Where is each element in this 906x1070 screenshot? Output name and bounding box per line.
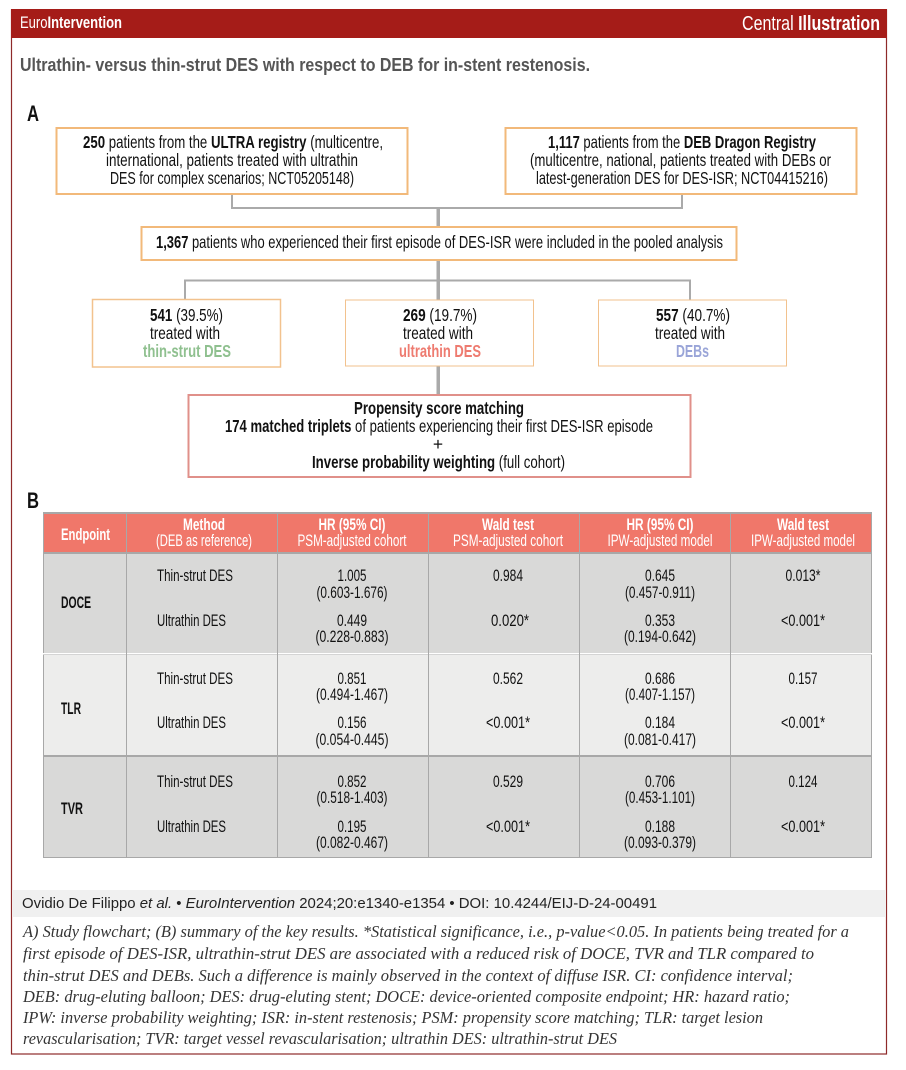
column dividers bbox=[126, 514, 731, 857]
row: TVR: (0.453-1.101) bbox=[625, 789, 695, 807]
table header bbox=[44, 514, 871, 552]
caption text: first episode of DES-ISR, ultrathin-strut DES are associated with a reduced risk of DOCE, TVR and TLR compared to bbox=[23, 944, 814, 963]
row: TVR: <0.001* bbox=[486, 818, 530, 836]
header bar bbox=[11, 9, 887, 38]
row: TLR bbox=[61, 670, 825, 749]
row: TVR: <0.001* bbox=[781, 818, 825, 836]
arrow: registries to pooled analysis bbox=[232, 194, 682, 208]
row: DOCE: 1.005 bbox=[338, 567, 366, 585]
row: TLR: 0.157 bbox=[788, 670, 818, 688]
row: DOCE: 0.645 bbox=[645, 567, 675, 585]
table header: HR (95% CI) bbox=[626, 516, 694, 534]
row: TVR: 0.852 bbox=[338, 773, 366, 791]
box: ULTRA registry: international, patients treated with ultrathin bbox=[106, 150, 358, 170]
table header: Endpoint bbox=[61, 526, 110, 544]
row: TVR: 0.195 bbox=[338, 818, 366, 836]
row: DOCE: <0.001* bbox=[781, 612, 825, 630]
row: TVR: 0.529 bbox=[493, 773, 523, 791]
table header: IPW-adjusted model bbox=[608, 532, 712, 550]
row: DOCE: Ultrathin DES bbox=[157, 612, 226, 630]
table header: (DEB as reference) bbox=[156, 532, 252, 550]
box: thin-strut DES group: treated with bbox=[150, 323, 220, 343]
row backgrounds bbox=[43, 554, 872, 857]
row: TLR: 0.562 bbox=[493, 670, 523, 688]
row: TLR: <0.001* bbox=[486, 714, 530, 732]
row: TLR: TLR bbox=[61, 700, 81, 718]
box: thin-strut DES group: 541 (39.5%) bbox=[150, 305, 223, 325]
row: TVR: Ultrathin DES bbox=[157, 818, 226, 836]
header bar: Central Illustration bbox=[742, 13, 880, 35]
arrow: to matching bbox=[436, 366, 440, 394]
box: ULTRA registry bbox=[56, 128, 408, 194]
panel: results table bbox=[43, 512, 872, 858]
row: TVR: 0.706 bbox=[645, 773, 675, 791]
table header: PSM-adjusted cohort bbox=[453, 532, 563, 550]
row: TLR: Ultrathin DES bbox=[157, 714, 226, 732]
box: ultrathin DES group bbox=[346, 300, 534, 366]
row: DOCE bbox=[61, 567, 825, 646]
table header: HR (95% CI) bbox=[318, 516, 386, 534]
row: TLR: (0.407-1.157) bbox=[625, 686, 695, 704]
row: TLR: (0.494-1.467) bbox=[316, 686, 388, 704]
box: ULTRA registry: 250 patients from the ULTRA registry (multicentre, bbox=[83, 132, 383, 152]
box: ultrathin DES group: 269 (19.7%) bbox=[403, 305, 477, 325]
row: TVR: (0.518-1.403) bbox=[316, 789, 388, 807]
row: TVR: 0.188 bbox=[645, 818, 675, 836]
caption text: A) Study flowchart; (B) summary of the key results. *Statistical significance, i.e., p-value<0.05. In patients being treated for a bbox=[22, 922, 849, 941]
row: DOCE: 0.353 bbox=[645, 612, 675, 630]
box: thin-strut DES group bbox=[92, 300, 280, 367]
row: TLR: (0.081-0.417) bbox=[624, 731, 696, 749]
caption text: revascularisation; TVR: target vessel revascularisation; ultrathin DES: ultrathin-strut DES bbox=[23, 1029, 617, 1048]
citation band bbox=[12, 890, 886, 917]
box: ultrathin DES group: ultrathin DES bbox=[399, 341, 481, 361]
row: DOCE: DOCE bbox=[61, 594, 91, 612]
table header: IPW-adjusted model bbox=[751, 532, 855, 550]
caption text: DEB: drug-eluting balloon; DES: drug-eluting stent; DOCE: device-oriented composite endpoint; HR: hazard ratio; bbox=[22, 987, 790, 1006]
row: TVR: TVR bbox=[61, 800, 83, 818]
citation band: Ovidio De Filippo et al. • EuroIntervention 2024;20:e1340-e1354 • DOI: 10.4244/EIJ-D-24-00491 bbox=[22, 895, 657, 912]
box: DEB group bbox=[598, 300, 786, 366]
arrow: pooled to treatment groups bbox=[185, 280, 690, 300]
box: DEB Dragon Registry bbox=[506, 128, 856, 194]
box: ULTRA registry: DES for complex scenarios; NCT05205148) bbox=[110, 168, 354, 188]
box: pooled analysis: 1,367 patients who experienced their first episode of DES-ISR were included in the pooled analysis bbox=[156, 232, 723, 252]
caption text: IPW: inverse probability weighting; ISR: in-stent restenosis; PSM: propensity score matching; TLR: target lesion bbox=[22, 1008, 763, 1027]
title: Ultrathin- versus thin-strut DES with respect to DEB for in-stent restenosis. bbox=[20, 54, 590, 75]
row: DOCE: (0.603-1.676) bbox=[316, 584, 388, 602]
row: DOCE: (0.457-0.911) bbox=[625, 584, 695, 602]
box: matching and weighting: 174 matched triplets of patients experiencing their first DES-ISR episode bbox=[225, 416, 653, 436]
panel label B: B bbox=[27, 488, 39, 513]
row: TLR: 0.184 bbox=[645, 714, 675, 732]
box: thin-strut DES group: thin-strut DES bbox=[143, 341, 231, 361]
box: DEB group: treated with bbox=[655, 323, 725, 343]
box: DEB group: DEBs bbox=[676, 341, 709, 361]
box: matching and weighting: Propensity score matching bbox=[354, 398, 524, 418]
row: DOCE: Thin-strut DES bbox=[157, 567, 233, 585]
row: TLR: Thin-strut DES bbox=[157, 670, 233, 688]
table header: Wald test bbox=[482, 516, 534, 534]
row: TLR: <0.001* bbox=[781, 714, 825, 732]
header bar: EuroIntervention bbox=[20, 14, 122, 32]
arrow: pooled connector centre bbox=[436, 260, 440, 300]
row: DOCE: 0.984 bbox=[493, 567, 523, 585]
box: ultrathin DES group: treated with bbox=[403, 323, 473, 343]
box: DEB Dragon Registry: 1,117 patients from the DEB Dragon Registry bbox=[548, 132, 816, 152]
row: DOCE: 0.020* bbox=[491, 612, 529, 630]
caption text bbox=[22, 922, 849, 1048]
box: matching and weighting bbox=[188, 395, 690, 477]
table header: Wald test bbox=[777, 516, 829, 534]
row: DOCE: (0.194-0.642) bbox=[624, 628, 696, 646]
table header: PSM-adjusted cohort bbox=[298, 532, 407, 550]
row: TLR: 0.156 bbox=[338, 714, 366, 732]
row: TVR: Thin-strut DES bbox=[157, 773, 233, 791]
row: TVR: 0.124 bbox=[788, 773, 818, 791]
row: DOCE: (0.228-0.883) bbox=[316, 628, 388, 646]
table header: Method bbox=[183, 516, 225, 534]
box: matching and weighting: Inverse probability weighting (full cohort) bbox=[312, 452, 565, 472]
row: DOCE: 0.013* bbox=[786, 567, 821, 585]
row: TVR: (0.093-0.379) bbox=[624, 834, 696, 852]
row: TLR: 0.686 bbox=[645, 670, 675, 688]
box: pooled analysis bbox=[142, 227, 736, 260]
row: TVR: (0.082-0.467) bbox=[316, 834, 388, 852]
row: TLR: 0.851 bbox=[338, 670, 366, 688]
row: DOCE: 0.449 bbox=[337, 612, 367, 630]
panel: study flowchart bbox=[56, 128, 856, 477]
caption text: thin-strut DES and DEBs. Such a difference is mainly observed in the context of diffuse ISR. CI: confidence interval; bbox=[23, 966, 793, 985]
panel label A: A bbox=[27, 101, 39, 126]
arrow: pooled connector trunk bbox=[436, 208, 440, 226]
box: matching and weighting: + bbox=[433, 434, 443, 454]
row: TVR bbox=[61, 773, 825, 852]
row: TLR: (0.054-0.445) bbox=[316, 731, 388, 749]
box: DEB group: 557 (40.7%) bbox=[656, 305, 730, 325]
